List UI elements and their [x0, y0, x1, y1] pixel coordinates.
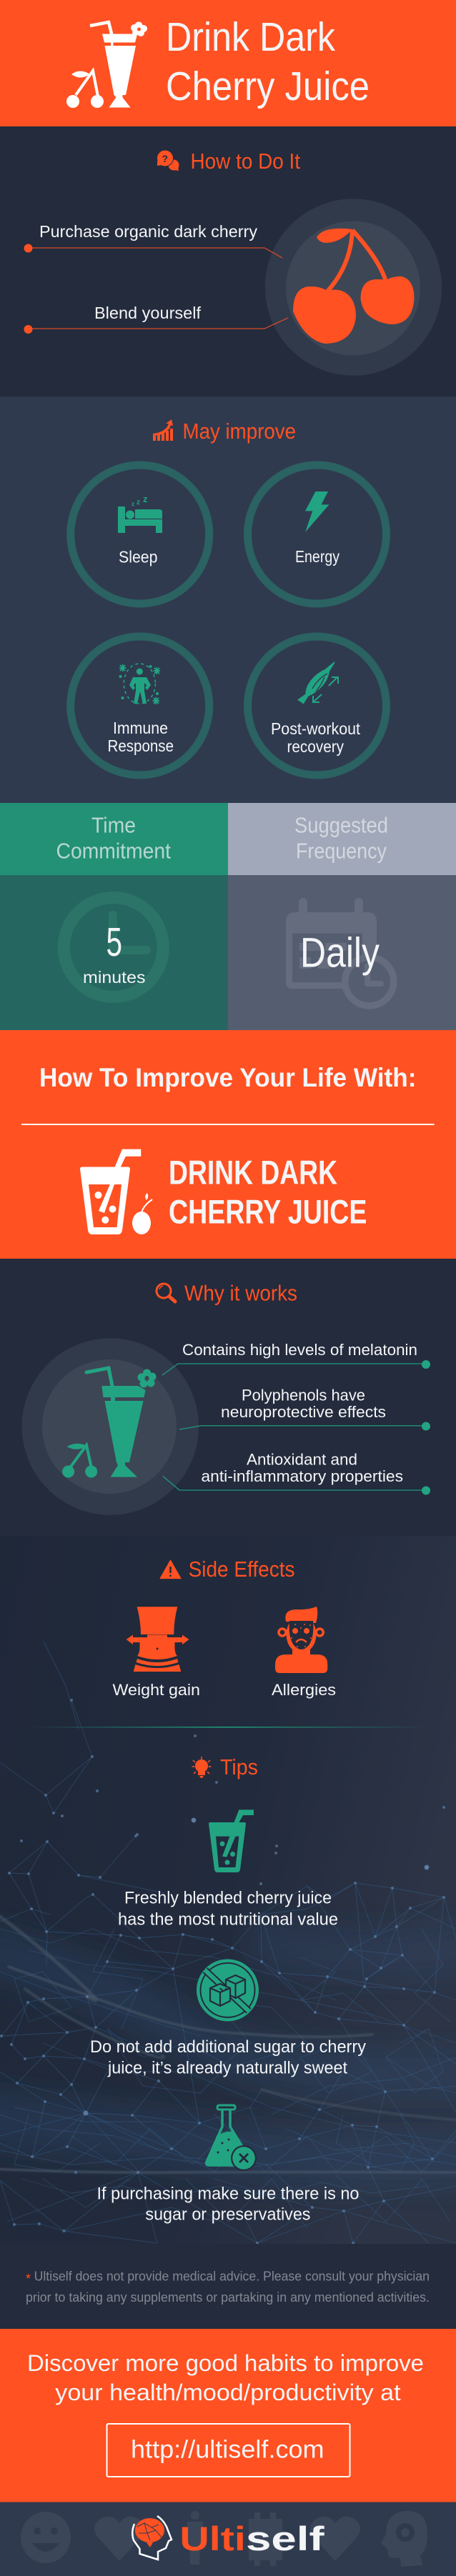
- icon: lightning bolt: [305, 491, 329, 532]
- callout: melatonin: [162, 1341, 430, 1375]
- icon: juice glass: [209, 1809, 254, 1872]
- callout: polyphenols: Polyphenols have: [242, 1386, 365, 1404]
- item: energy: [247, 465, 386, 604]
- panel: footer: [0, 2502, 456, 2576]
- item: immune response: [71, 636, 209, 775]
- panel: may improve: [0, 396, 456, 803]
- disclaimer text: Ultiself does not provide medical advice. Please consult your physician: [34, 2269, 430, 2283]
- panel: suggested frequency: [228, 803, 456, 1030]
- heading: suggested frequency: Frequency: [296, 839, 387, 864]
- item: post-workout recovery: [247, 636, 386, 775]
- item: immune response: Immune: [113, 719, 168, 737]
- icon: bed: z: [143, 494, 148, 504]
- title: Cherry Juice: [166, 64, 370, 109]
- text: discover more: Discover more good habits to improve: [27, 2350, 424, 2376]
- panel: header: [0, 0, 456, 126]
- button: website link: http://ultiself.com: [131, 2436, 324, 2464]
- item: allergies: Allergies: [272, 1681, 336, 1699]
- tip: check for preservatives: If purchasing make sure there is no: [97, 2185, 359, 2203]
- logo: ultiself: Ulti: [179, 2520, 246, 2557]
- item: sleep: [71, 465, 209, 604]
- asterisk: *: [26, 2272, 31, 2286]
- icon: rising chart: [153, 419, 173, 441]
- callout: purchase organic dark cherry: Purchase organic dark cherry: [39, 222, 258, 241]
- tip: check for preservatives: sugar or preservatives: [145, 2205, 310, 2225]
- value: 5 minutes: [83, 919, 146, 987]
- graphic: glass in circles: [22, 1338, 199, 1515]
- button: website link: [107, 2424, 350, 2477]
- heading: side effects: Side Effects: [189, 1557, 294, 1582]
- value: daily: Daily: [300, 930, 380, 976]
- callout: polyphenols: [179, 1386, 430, 1430]
- icon: bed: [118, 494, 162, 533]
- callout: purchase organic dark cherry: [24, 222, 282, 258]
- panel: how to improve banner: [0, 1030, 456, 1259]
- icon: magnifier: [157, 1284, 175, 1302]
- heading: time commitment: Time: [91, 813, 136, 838]
- background: faded icons: [21, 2511, 427, 2567]
- disclaimer text: [26, 2269, 430, 2305]
- tip: no added sugar: Do not add additional sugar to cherry: [90, 2037, 366, 2057]
- icon: muscle: [298, 662, 338, 704]
- title: Drink Dark: [166, 14, 335, 60]
- item: allergies: [272, 1607, 336, 1699]
- logo: ultiself: self: [246, 2520, 324, 2557]
- graphic: cherries in circles: [265, 199, 442, 376]
- background: network mesh: [0, 1642, 456, 2243]
- text: discover more: your health/mood/productivity at: [55, 2380, 401, 2405]
- heading: how to improve your life with: How To Improve Your Life With:: [39, 1063, 416, 1092]
- callout: antioxidant: Antioxidant and: [247, 1451, 357, 1469]
- heading: time commitment: Commitment: [56, 839, 171, 864]
- callout: antioxidant: anti-inflammatory properties: [202, 1467, 403, 1485]
- title: [166, 14, 370, 109]
- panel: why it works: [0, 1259, 456, 1536]
- item: post-workout recovery: Post-workout: [271, 719, 361, 738]
- icon: bed: z: [137, 499, 140, 506]
- icon: protected person: [119, 664, 160, 704]
- icon: waist with arrows: [127, 1607, 189, 1672]
- heading: why it works: Why it works: [184, 1280, 297, 1306]
- callout: polyphenols: neuroprotective effects: [221, 1403, 386, 1421]
- item: energy: Energy: [295, 547, 339, 566]
- heading: may improve: May improve: [183, 419, 296, 444]
- callout: melatonin: Contains high levels of melatonin: [182, 1341, 417, 1359]
- item: sleep: Sleep: [119, 547, 157, 566]
- logo: ultiself: [132, 2516, 324, 2560]
- panel: how to do it: [0, 126, 456, 396]
- panel: side effects and tips with network background: [0, 1536, 456, 2244]
- tip: freshly blended: [118, 1809, 338, 1929]
- icon: question bubbles: ?: [162, 153, 168, 164]
- heading: tips: Tips: [220, 1754, 258, 1779]
- disclaimer text: prior to taking any supplements or partaking in any mentioned activities.: [26, 2290, 430, 2305]
- tip: no added sugar: [90, 1959, 366, 2078]
- item: immune response: Response: [107, 737, 174, 755]
- heading: suggested frequency: [294, 813, 388, 864]
- text: discover more: [27, 2350, 424, 2405]
- callout: antioxidant: [163, 1451, 430, 1494]
- tip: freshly blended: Freshly blended cherry juice: [124, 1889, 332, 1908]
- panel: disclaimer: [0, 2244, 456, 2329]
- heading: suggested frequency: Suggested: [294, 813, 388, 838]
- item: weight gain: Weight gain: [113, 1681, 200, 1699]
- tip: check for preservatives: [97, 2105, 359, 2225]
- title: drink dark cherry juice: DRINK DARK: [169, 1153, 337, 1192]
- callout: blend yourself: [24, 304, 288, 334]
- item: post-workout recovery: recovery: [287, 737, 344, 756]
- icon: flask with x: [207, 2105, 257, 2171]
- icon: bed: z: [132, 501, 134, 507]
- icon: juice glass with cherries: [66, 21, 147, 108]
- icon: warning triangle: [160, 1560, 181, 1579]
- title: drink dark cherry juice: CHERRY JUICE: [169, 1193, 367, 1231]
- icon: question bubbles: [157, 150, 179, 171]
- heading: how to do it: How to Do It: [190, 149, 300, 174]
- value: 5 minutes: 5: [106, 919, 122, 965]
- icon: no sugar cubes: [197, 1959, 259, 2022]
- icon: face with rash: [275, 1607, 327, 1673]
- panel: time commitment: [0, 803, 228, 1030]
- icon: calendar and clock: [286, 902, 394, 1006]
- icon: light bulb: [192, 1757, 212, 1778]
- title: drink dark cherry juice: [169, 1153, 367, 1231]
- panel: call to action: [0, 2329, 456, 2502]
- icon: head with brain: [132, 2516, 172, 2560]
- heading: time commitment: [56, 813, 171, 864]
- value: 5 minutes: minutes: [83, 968, 146, 987]
- icon: juice glass with cherry: [80, 1149, 152, 1234]
- callout: blend yourself: Blend yourself: [94, 304, 202, 322]
- item: weight gain: [113, 1607, 200, 1699]
- tip: no added sugar: juice, it’s already naturally sweet: [107, 2059, 347, 2078]
- tip: freshly blended: has the most nutritional value: [118, 1909, 338, 1929]
- icon: clock: [64, 897, 163, 997]
